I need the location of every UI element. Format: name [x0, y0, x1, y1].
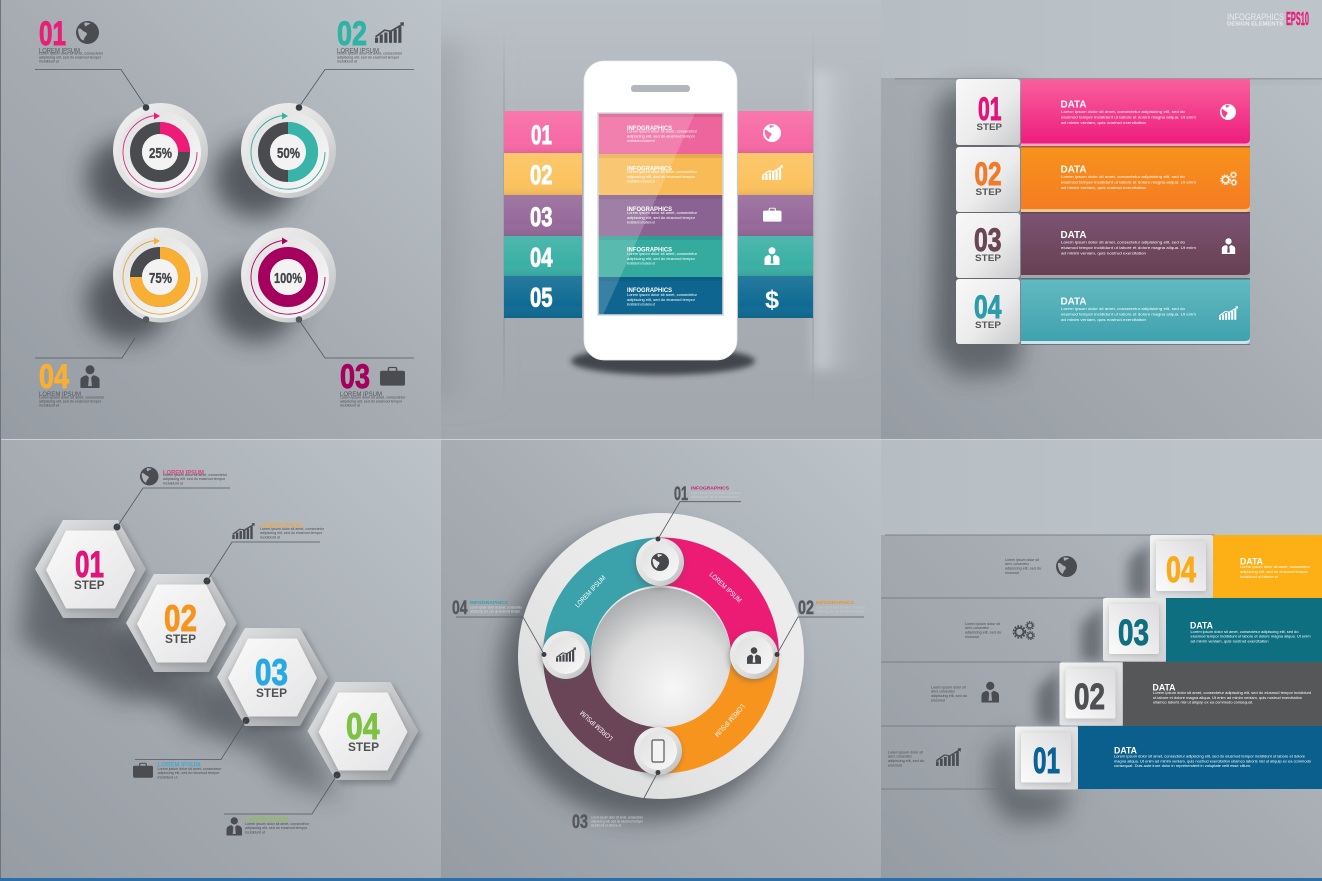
stair 03: Lorem ipsum dolor sit — [965, 622, 1000, 626]
phone screen: INFOGRAPHICS — [627, 246, 672, 254]
callout 04: 04 — [39, 358, 69, 396]
phone screen: adipiscing elit, sed do eiusmod tempor — [627, 174, 696, 179]
callout 02: adipiscing elit, sed do eiusmod tempor — [337, 56, 400, 60]
stair 03: eiusmod tempor incididunt ut labore et dolore magna aliqua. Ut enim — [1190, 634, 1310, 638]
stair 04: amet, consectetur — [1005, 562, 1030, 566]
large disc — [518, 513, 804, 799]
stair 02: ullamco laboris nisi ut aliquip ex ea commodo consequat. — [1153, 700, 1253, 704]
hexagon 01: 01 — [75, 544, 104, 585]
phone screen: incididunt ut labore et — [627, 178, 656, 184]
hexagon 01 — [35, 520, 148, 622]
callout 02: LOREM IPSUM — [337, 48, 379, 54]
step 04 — [956, 278, 1250, 345]
stair 02: 02 — [1074, 676, 1105, 717]
stair 02: Lorem ipsum dolor sit — [931, 686, 966, 690]
stair 01: magna aliqua. Ut enim ad minim veniam, quis nostrud exercitation ullamco laboris nisi ut aliquip ex ea commodo — [1114, 758, 1311, 764]
cycle callout 04: adipiscing elit, sed do eiusmod tempor — [470, 610, 521, 614]
phone screen: adipiscing elit, sed do eiusmod tempor — [627, 215, 696, 220]
stair 04: incididunt ut labore et — [1240, 574, 1279, 579]
phone screen: incididunt ut labore et — [627, 302, 656, 306]
stair 04 — [1005, 535, 1322, 598]
hexagon 02: 02 — [164, 598, 197, 639]
phone screen: INFOGRAPHICS — [627, 166, 672, 172]
cycle callout 01 — [656, 484, 742, 542]
panel: smartphone with bands — [441, 40, 844, 387]
stair 04: DATA — [1240, 556, 1263, 568]
ring segments: LOREM IPSUM — [579, 709, 615, 741]
callout 02 — [299, 15, 414, 107]
brand mark: INFOGRAPHICS — [1227, 12, 1284, 22]
phone screen: INFOGRAPHICS — [627, 125, 672, 132]
step 02: STEP — [976, 187, 1002, 198]
step 03: Lorem ipsum dolor sit amet, consectetur adipisicing elit, sed do — [1061, 240, 1185, 244]
node: bottom phone — [633, 727, 682, 777]
callout 04: adipiscing elit, sed do eiusmod tempor — [39, 400, 102, 404]
cycle callout 01: INFOGRAPHICS — [691, 486, 729, 490]
step 02: eiusmod tempor incididunt ut labore et dolore magna aliqua. Ut enim — [1061, 180, 1196, 184]
step 01: STEP — [976, 122, 1003, 133]
hex callout 01 — [117, 467, 230, 527]
cycle callout 04: Lorem ipsum dolor sit amet, consectetur — [470, 606, 523, 610]
phone screen: incididunt ut labore et — [627, 260, 656, 266]
hexagon 04: STEP — [348, 740, 379, 754]
dial: 100% — [241, 228, 336, 323]
stair 02: eiusmod — [931, 698, 945, 702]
brand mark — [1227, 9, 1309, 29]
hex callout 03 — [133, 720, 246, 780]
hex callout 02: incididunt ut — [260, 536, 280, 540]
left bands with numbers: 04 — [530, 242, 552, 272]
cycle callout 03: Lorem ipsum dolor sit amet, consectetur — [591, 816, 644, 820]
phone screen: adipiscing elit, sed do eiusmod tempor — [627, 297, 696, 302]
hexagon 04: 04 — [346, 706, 380, 747]
hex callout 01: adipiscing elit, sed do eiusmod tempor — [163, 477, 226, 481]
step 02: DATA — [1060, 164, 1087, 176]
hexagon 04 — [308, 682, 421, 784]
hex callout 04: LOREM IPSUM — [245, 818, 288, 824]
stair 02 — [931, 662, 1322, 726]
hexagon 01: STEP — [74, 578, 104, 592]
callout 01: 01 — [39, 15, 66, 53]
step 04: 04 — [974, 289, 1002, 325]
hex callout 02: adipiscing elit, sed do eiusmod tempor — [260, 531, 323, 535]
phone body — [584, 61, 737, 360]
step 02: 02 — [974, 156, 1002, 192]
callout 02: 02 — [337, 15, 367, 53]
phone screen: Lorem ipsum dolor sit amet, consectetur — [627, 169, 698, 174]
callout 01: adipiscing elit, sed do eiusmod tempor — [39, 56, 102, 60]
phone screen: adipiscing elit, sed do eiusmod tempor — [627, 256, 696, 261]
cycle callout 03: incididunt ut labore et — [591, 824, 621, 828]
step 03: 03 — [974, 222, 1002, 258]
step 03: STEP — [975, 253, 1002, 264]
panel: hexagon steps — [20, 467, 421, 836]
hex callout 01: Lorem ipsum dolor sit amet, consectetur — [163, 473, 228, 477]
step 01: DATA — [1060, 98, 1087, 110]
cycle callout 04: 04 — [452, 598, 468, 619]
step 03: ad minim veniam, quis nostrud exercitation — [1061, 250, 1146, 256]
step 01 — [956, 79, 1250, 146]
hex callout 02: Lorem ipsum dolor sit amet, consectetur — [260, 527, 325, 531]
stair 02: DATA — [1152, 682, 1176, 694]
left bands with numbers: 05 — [530, 282, 552, 312]
phone screen: incididunt ut labore et — [627, 220, 656, 224]
phone screen: INFOGRAPHICS — [627, 287, 672, 294]
hex callout 03: Lorem ipsum dolor sit amet, consectetur — [158, 767, 222, 771]
hex callout 04: Lorem ipsum dolor sit amet, consectetur — [245, 822, 310, 826]
step 01: Lorem ipsum dolor sit amet, consectetur adipisicing elit, sed do — [1061, 109, 1185, 114]
cycle callout 01: 01 — [674, 484, 688, 505]
callout 04: LOREM IPSUM — [39, 391, 81, 398]
callout 04: incididunt ut — [39, 404, 59, 408]
left bands with numbers: 01 — [531, 120, 552, 150]
panel: percentage dials — [35, 15, 414, 408]
hex callout 04: adipiscing elit, sed do eiusmod tempor — [245, 826, 308, 830]
dial: 50%: 50% — [277, 145, 300, 162]
stair 01: amet, consectetur — [888, 754, 913, 758]
stair 01: adipiscing elit, sed do — [888, 759, 924, 763]
hex callout 03: adipiscing elit, sed do eiusmod tempor — [158, 771, 220, 775]
hexagon 03 — [217, 628, 330, 730]
hex callout 03: incididunt ut — [158, 776, 178, 780]
panel: staircase steps — [881, 534, 1322, 822]
step 01: 01 — [978, 91, 1002, 127]
step 04: STEP — [975, 320, 1002, 331]
stair 03: eiusmod — [965, 635, 979, 639]
stair 02: amet, consectetur — [931, 690, 956, 694]
phone screen — [598, 113, 723, 315]
step 03 — [956, 212, 1250, 278]
step 01: eiusmod tempor incididunt ut labore et dolore magna aliqua. Ut enim — [1061, 114, 1196, 120]
stair 04: adipiscing elit, sed do eiusmod tempor — [1240, 569, 1309, 574]
cycle callout 02: INFOGRAPHICS — [816, 600, 854, 605]
stair 04: Lorem ipsum dolor sit — [1005, 558, 1039, 562]
stair 03: amet, consectetur — [965, 626, 990, 630]
stair 02: adipiscing elit, sed do — [931, 694, 967, 698]
left bands with numbers: 02 — [530, 160, 552, 190]
cycle callout 02: adipiscing elit, sed do eiusmod tempor — [816, 610, 865, 614]
ring segments: LOREM IPSUM — [574, 574, 608, 609]
ring segments — [567, 562, 755, 750]
right bands with icons: $ — [765, 286, 779, 314]
callout 04 — [35, 338, 135, 408]
stair 01: 01 — [1033, 740, 1060, 781]
cycle callout 03 — [572, 770, 660, 833]
callout 01: incididunt ut — [39, 60, 59, 64]
hex callout 01: incididunt ut — [163, 482, 183, 486]
dial: 50% — [241, 103, 336, 198]
hex callout 01: LOREM IPSUM — [163, 470, 204, 476]
cycle callout 03: adipiscing elit, sed do eiusmod tempor — [591, 820, 644, 824]
panel: four step ribbons — [895, 9, 1322, 378]
hex callout 04: incididunt ut — [245, 830, 265, 834]
step 03: eiusmod tempor incididunt ut labore et dolore magna aliqua. Ut enim — [1061, 245, 1196, 250]
cycle callout 02: Lorem ipsum dolor sit amet, consectetur — [816, 606, 867, 610]
stair 02: Lorem ipsum dolor sit amet, consectetur adipiscing elit, sed do eiusmod tempor incididunt — [1153, 690, 1312, 695]
hex callout 04 — [224, 775, 337, 836]
step 02: Lorem ipsum dolor sit amet, consectetur adipisicing elit, sed do — [1061, 174, 1185, 179]
left bands with numbers — [504, 111, 582, 318]
dial: 75% — [113, 228, 208, 323]
step 02 — [956, 146, 1250, 212]
cycle callout 02 — [774, 598, 867, 657]
panel: circular cycle — [452, 484, 867, 833]
callout 04: Lorem ipsum dolor sit amet, consectetur — [39, 396, 105, 400]
callout 01: LOREM IPSUM — [39, 48, 80, 54]
phone screen: Lorem ipsum dolor sit amet, consectetur — [627, 251, 698, 256]
stair 02: ut labore et dolore magna aliqua. Ut enim ad minim veniam, quis nostrud exercitation — [1153, 695, 1302, 700]
right bands with icons — [738, 111, 813, 318]
cycle callout 01: adipiscing elit, sed do eiusmod tempor — [691, 495, 740, 499]
brand mark: DESIGN ELEMENTS — [1227, 22, 1284, 28]
stair 03 — [965, 598, 1322, 662]
callout 03: LOREM IPSUM — [340, 391, 382, 398]
cycle callout 04: INFOGRAPHICS — [470, 600, 508, 605]
node: right person — [729, 631, 778, 681]
phone screen: Lorem ipsum dolor sit amet, consectetur — [627, 210, 698, 215]
phone screen: adipiscing elit, sed do eiusmod tempor — [627, 134, 696, 138]
stair 01: consequat. Duis aute irure dolor in reprehenderit in voluptate velit esse cillum. — [1114, 763, 1251, 768]
hex callout 02: LOREM IPSUM — [260, 524, 302, 530]
stair 01: Lorem ipsum dolor sit amet, consectetur adipiscing elit, sed do eiusmod tempor incididunt ut labore et dolore — [1114, 754, 1305, 758]
callout 02: Lorem ipsum dolor sit amet, consectetur — [337, 52, 403, 56]
hexagon 03: STEP — [256, 686, 287, 700]
stair 04: adipiscing elit, sed do — [1005, 566, 1041, 570]
stair 03: adipiscing elit, sed do — [965, 630, 1001, 634]
callout 02: incididunt ut — [337, 60, 357, 64]
step 04: ad minim veniam, quis nostrud exercitation — [1061, 317, 1146, 322]
hexagon 03: 03 — [255, 652, 288, 693]
phone screen: INFOGRAPHICS — [627, 206, 672, 213]
node: top globe — [635, 538, 684, 588]
stair 04: eiusmod — [1005, 571, 1019, 575]
stair 03: DATA — [1190, 620, 1213, 632]
callout 03: adipiscing elit, sed do eiusmod tempor — [340, 400, 403, 404]
callout 03: Lorem ipsum dolor sit amet, consectetur — [340, 396, 406, 400]
phone screen: Lorem ipsum dolor sit amet, consectetur — [627, 128, 698, 134]
hexagon 02: STEP — [165, 632, 196, 646]
node: left chart — [541, 631, 590, 681]
stair 01 — [888, 726, 1322, 790]
callout 03: incididunt ut — [340, 404, 360, 408]
hex callout 02 — [207, 523, 325, 581]
step 01: ad minim veniam, quis nostrud exercitation — [1061, 120, 1146, 125]
stair 01: DATA — [1114, 746, 1137, 756]
cycle callout 03: 03 — [572, 812, 588, 833]
ring segments: LOREM IPSUM — [708, 571, 743, 605]
left bands with numbers: 03 — [530, 202, 552, 232]
callout 01: Lorem ipsum dolor sit amet, consectetur — [39, 52, 104, 56]
stair 03: ad minim veniam, quis nostrud exercitation — [1190, 638, 1268, 644]
ring segments: LOREM IPSUM — [713, 702, 745, 738]
stair 03: Lorem ipsum dolor sit amet, consectetur adipiscing elit, sed do — [1190, 629, 1298, 634]
step 04: eiusmod tempor incididunt ut labore et dolore magna aliqua. Ut enim — [1061, 312, 1196, 316]
dial: 100%: 100% — [274, 270, 302, 287]
hex callout 03: LOREM IPSUM — [158, 762, 200, 768]
phone screen: Lorem ipsum dolor sit amet, consectetur — [627, 292, 698, 297]
step 03: DATA — [1060, 229, 1087, 241]
cycle callout 04 — [452, 598, 546, 657]
stair 01: eiusmod — [888, 764, 902, 768]
callout 03 — [299, 320, 414, 408]
step 04: Lorem ipsum dolor sit amet, consectetur adipisicing elit, sed do — [1061, 306, 1185, 311]
step 02: ad minim veniam, quis nostrud exercitation — [1061, 185, 1146, 190]
hexagon 02 — [126, 574, 240, 676]
callout 03: 03 — [340, 358, 370, 396]
callout 01 — [35, 15, 146, 107]
step 04: DATA — [1060, 296, 1087, 308]
phone screen: incididunt ut labore et — [627, 138, 656, 143]
stair 01: Lorem ipsum dolor sit — [888, 750, 923, 754]
dial: 75%: 75% — [149, 270, 172, 287]
stair 04: Lorem ipsum dolor sit amet, consectetur — [1240, 564, 1311, 569]
cycle callout 02: 02 — [798, 598, 814, 619]
stair 03: 03 — [1118, 612, 1149, 653]
cycle callout 01: Lorem ipsum dolor sit amet, consectetur — [691, 491, 742, 495]
stair 04: 04 — [1166, 549, 1196, 590]
dial: 25% — [113, 103, 208, 198]
dial: 25%: 25% — [149, 145, 172, 162]
